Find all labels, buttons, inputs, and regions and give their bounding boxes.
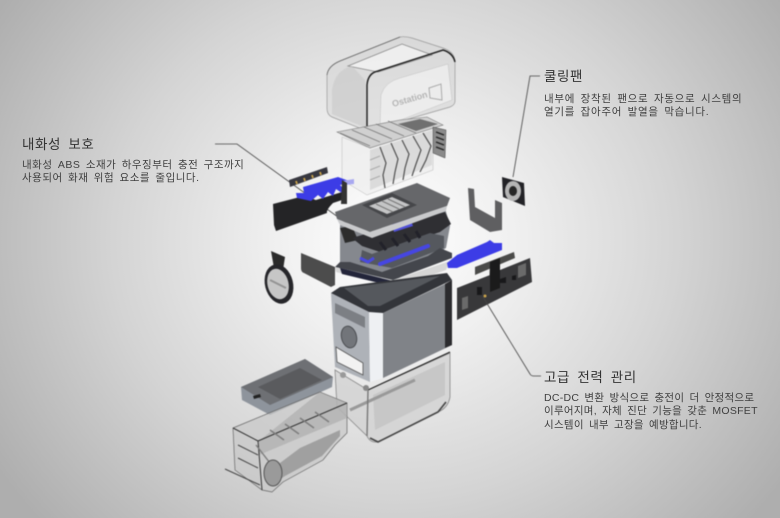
left leader line [215,144,367,238]
text: cooling fan [544,93,742,118]
blue insulator left [296,177,354,201]
power leader line [483,297,541,376]
mechanism assembly [335,208,452,288]
heading: cooling fan: 쿨링팬 [544,69,583,84]
text: cooling fan: 열기를 잡아주어 발열을 막습니다. [544,106,709,118]
dark flap panel [301,253,335,287]
heading: fire resistance: 내화성 보호 [22,137,94,152]
text: cooling fan: 내부에 장착된 팬으로 자동으로 시스템의 [544,93,742,105]
blue insulator right [447,240,502,268]
main housing body [331,273,452,382]
top transparent cover: Ostation [391,89,429,109]
battery cage [225,392,347,492]
text: power management: 이루어지며, 자체 진단 기능을 갖춘 MOSFET [544,405,758,417]
main circuit board [457,258,532,320]
text: power management: 시스템이 내부 고장을 예방합니다. [544,419,702,431]
black side plate [273,192,342,231]
disc module [261,251,297,307]
lower transparent tank [335,352,450,442]
heading: power management: 고급 전력 관리 [544,370,637,385]
cooling fan leader line [513,76,540,177]
small parts by frame [341,180,347,204]
cooling fan [502,177,525,206]
text: power management: DC-DC 변환 방식으로 충전이 더 안정적으로 [544,392,754,404]
text: power management [544,392,758,431]
text: fire resistance: 사용되어 화재 위험 요소를 줄입니다. [22,172,200,184]
text: fire resistance [22,159,244,184]
grey top plate with window [335,183,450,238]
top transparent cover [327,37,455,131]
U bracket [468,188,502,232]
transparent battery frame with wires [337,117,446,195]
text: fire resistance: 내화성 ABS 소재가 하우징부터 충전 구조까지 [22,159,244,171]
small circuit strip [475,252,515,293]
grey tray [241,359,333,415]
connector strip left [289,167,328,187]
